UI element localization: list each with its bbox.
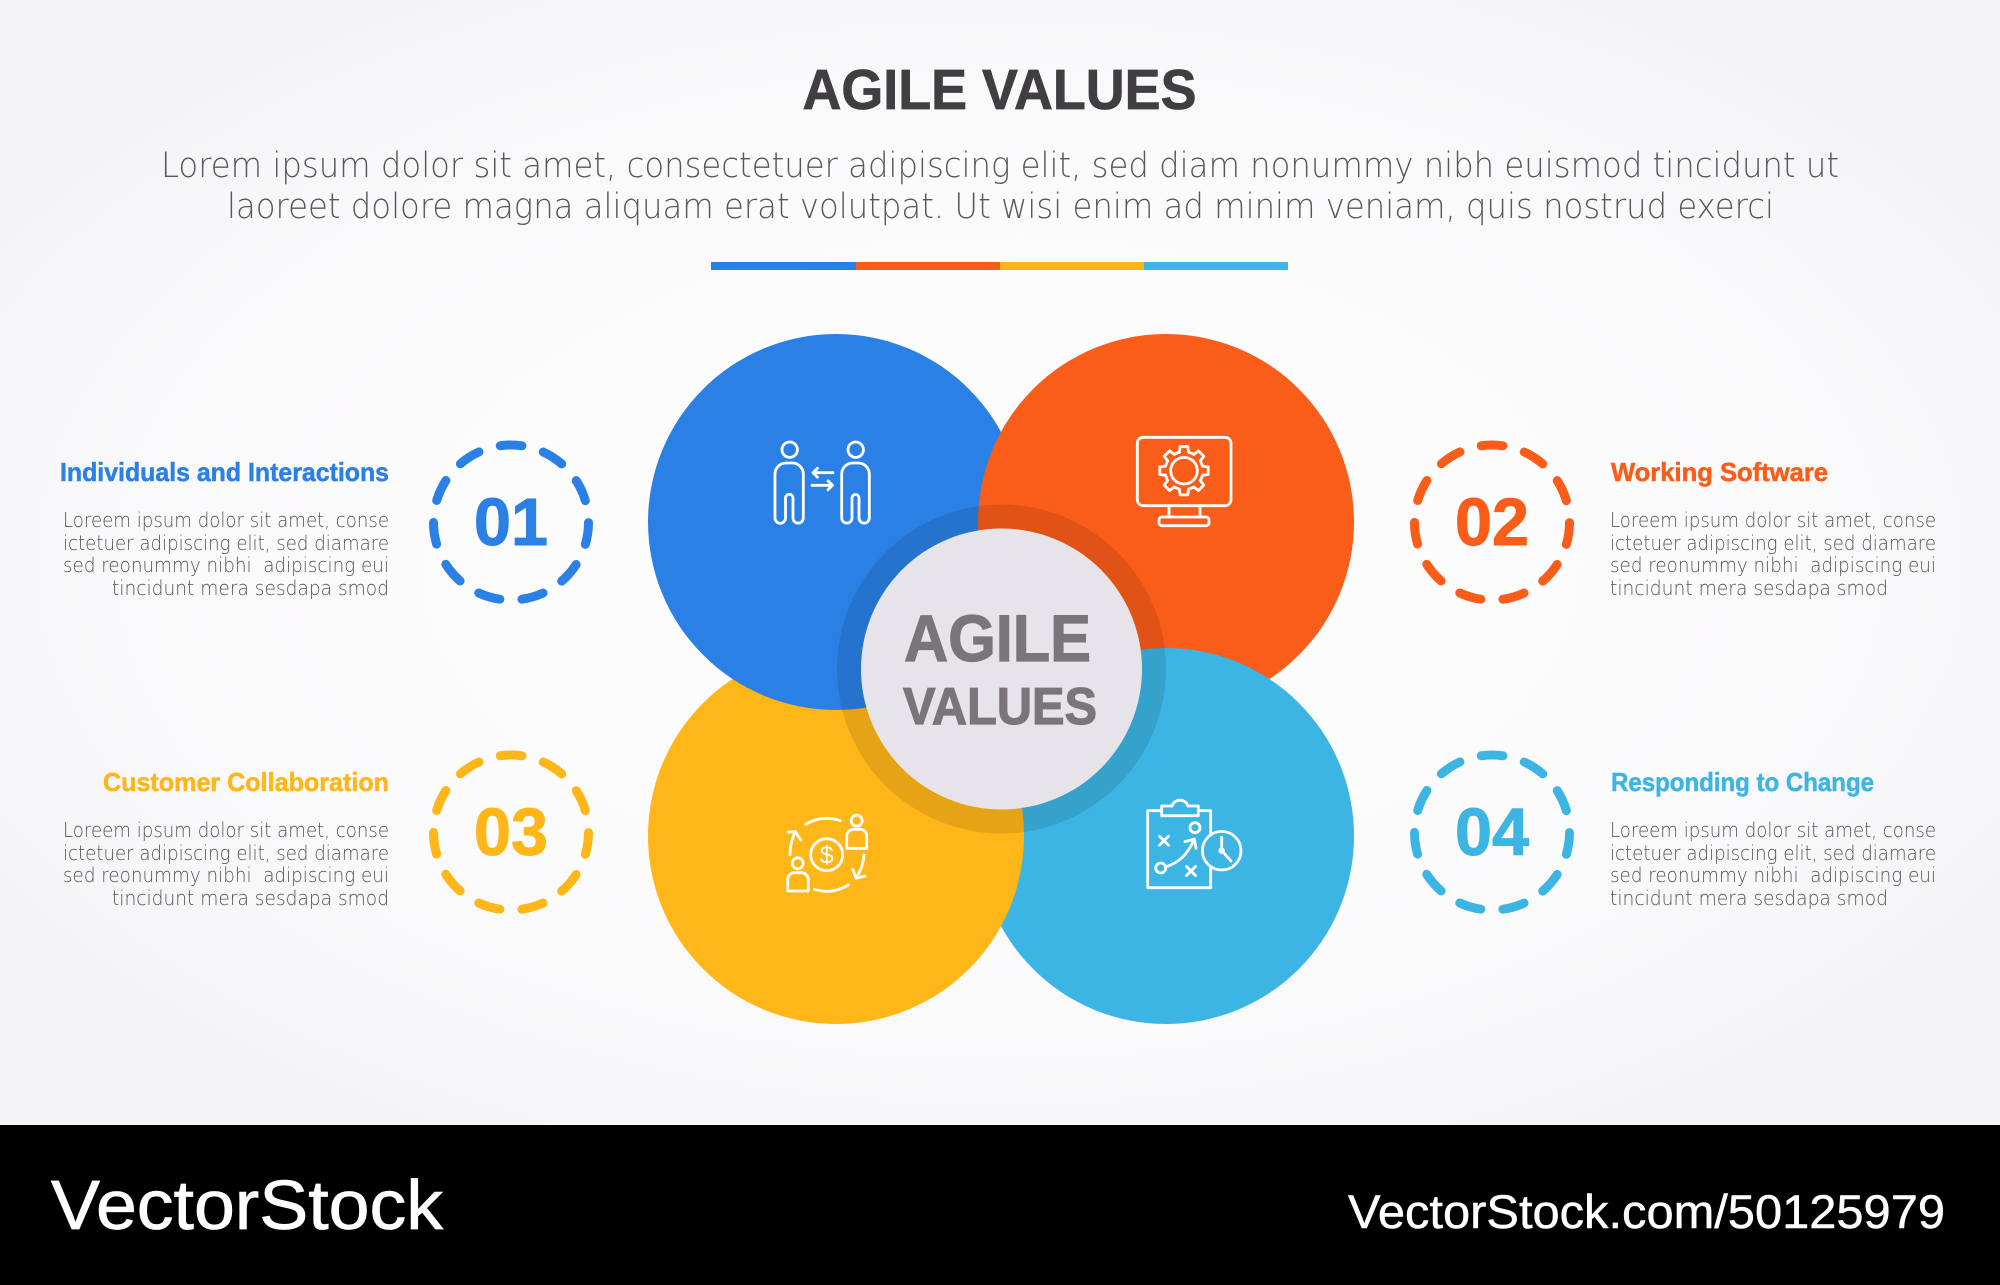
body text: tincidunt mera sesdapa smod [1610, 886, 1888, 910]
body text: Loreem ipsum dolor sit amet, conse [63, 508, 389, 532]
title: AGILE VALUES [802, 58, 1196, 122]
body text [63, 508, 389, 600]
centre circle [861, 528, 1142, 810]
body text: Loreem ipsum dolor sit amet, conse [63, 818, 389, 842]
centre label: AGILE [904, 601, 1091, 675]
dashed number ring [434, 755, 588, 910]
footer brand: VectorStock [51, 1166, 444, 1244]
item 01: individuals and interactions [60, 445, 588, 600]
body text: tincidunt mera sesdapa smod [1610, 576, 1888, 600]
body text: sed reonummy nibhi adipiscing eui [1610, 863, 1936, 887]
icon: monitor with gear [1137, 437, 1231, 526]
body text: sed reonummy nibhi adipiscing eui [63, 863, 389, 887]
body text [1610, 508, 1936, 600]
centre label [903, 601, 1097, 736]
body text: ictetuer adipiscing elit, sed diamare [63, 531, 389, 555]
number: 04 [1455, 795, 1529, 870]
watermark footer band [0, 1125, 2000, 1285]
centre ring [837, 504, 1166, 834]
footer image id: VectorStock.com/50125979 [1348, 1185, 1945, 1238]
item 03: customer collaboration [63, 755, 588, 910]
body text: ictetuer adipiscing elit, sed diamare [1610, 531, 1936, 555]
centre label: VALUES [903, 678, 1097, 736]
icon: money exchange between people [788, 815, 867, 891]
subtitle text: Lorem ipsum dolor sit amet, consectetuer adipiscing elit, sed diam nonummy nibh euismod tincidunt ut [161, 146, 1839, 186]
number: 02 [1455, 485, 1529, 560]
number: 03 [474, 795, 548, 870]
colour divider bar [711, 262, 1288, 270]
body text: tincidunt mera sesdapa smod [112, 576, 389, 600]
dashed number ring [434, 445, 588, 600]
icon: clipboard plan with clock [1148, 800, 1241, 888]
heading: Responding to Change [1611, 767, 1874, 797]
body text: sed reonummy nibhi adipiscing eui [1610, 553, 1936, 577]
item 04: responding to change [1414, 755, 1936, 910]
body text: ictetuer adipiscing elit, sed diamare [63, 841, 389, 865]
body text: sed reonummy nibhi adipiscing eui [63, 553, 389, 577]
icon: money exchange between people: $ [820, 842, 834, 870]
subtitle text: laoreet dolore magna aliquam erat volutpat. Ut wisi enim ad minim veniam, quis nostrud exerci [227, 187, 1774, 227]
dashed number ring [1414, 755, 1570, 910]
heading: Customer Collaboration [103, 767, 389, 797]
body text [63, 818, 389, 910]
number: 01 [474, 485, 548, 560]
item 02: working software [1414, 445, 1936, 600]
subtitle text [161, 146, 1839, 227]
body text [1610, 818, 1936, 910]
body text: Loreem ipsum dolor sit amet, conse [1610, 818, 1936, 842]
dashed number ring [1414, 445, 1570, 600]
four overlapping circles [648, 334, 1354, 1024]
heading: Working Software [1611, 457, 1828, 487]
body text: tincidunt mera sesdapa smod [112, 886, 389, 910]
body text: ictetuer adipiscing elit, sed diamare [1610, 841, 1936, 865]
heading: Individuals and Interactions [60, 457, 389, 487]
icon: two people exchanging [775, 442, 869, 523]
body text: Loreem ipsum dolor sit amet, conse [1610, 508, 1936, 532]
